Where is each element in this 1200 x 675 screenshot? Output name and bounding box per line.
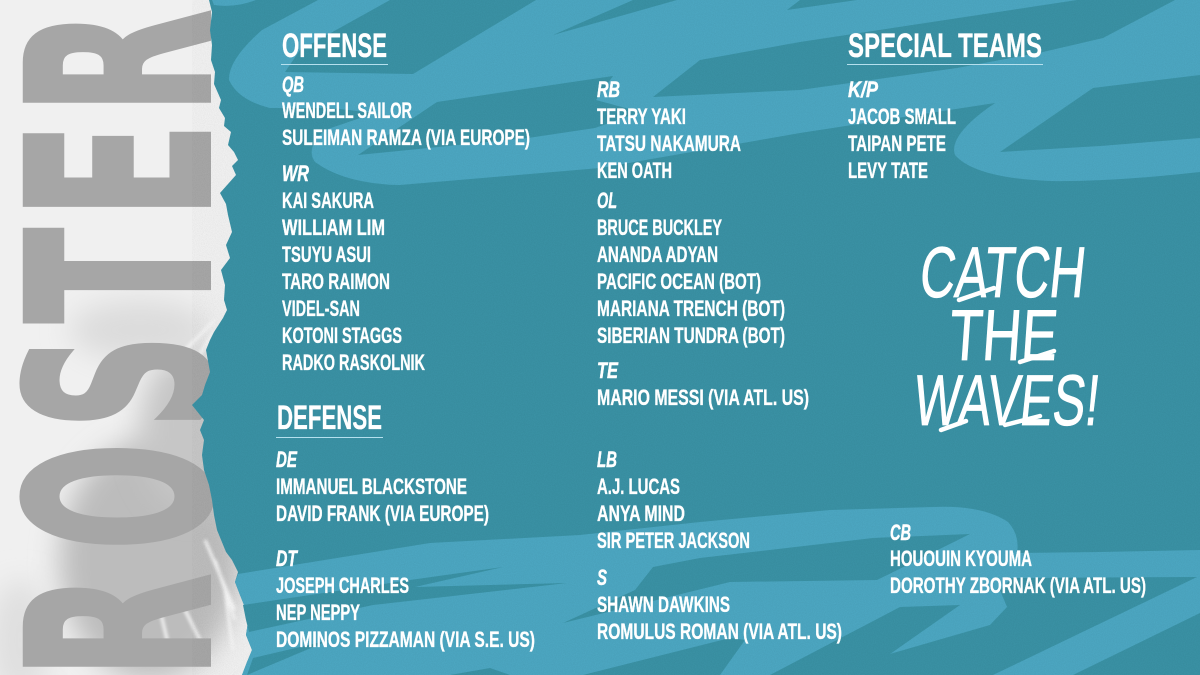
brush strokes: top scribble [212,0,1200,185]
title: ROSTER vertical [0,10,268,675]
roster: defensive tackles: NEP NEPPY [276,600,360,625]
roster: wide receivers: KOTONI STAGGS [282,323,402,348]
roster: defensive ends: DAVID FRANK (VIA EUROPE) [276,501,489,526]
roster: defensive ends: DE [276,447,298,472]
roster: quarterbacks [282,72,530,150]
roster: safeties: SHAWN DAWKINS [597,592,730,617]
roster: defensive tackles: DT [276,546,299,571]
roster: cornerbacks: CB [890,520,911,545]
slogan: catch the waves: WAVES! [910,361,1104,441]
roster: kicker and punter [848,77,956,183]
roster: wide receivers: VIDEL-SAN [282,296,360,321]
slogan: catch the waves: CATCH [916,233,1090,313]
roster: offensive line: BRUCE BUCKLEY [597,215,722,240]
roster: linebackers: LB [597,447,617,472]
roster: safeties: ROMULUS ROMAN (VIA ATL. US) [597,619,842,644]
heading: special teams: SPECIAL TEAMS [848,27,1042,65]
roster: wide receivers: TARO RAIMON [282,269,390,294]
roster: quarterbacks: QB [282,72,304,97]
heading: offense [281,27,388,65]
roster: linebackers [597,447,750,553]
roster: running backs [597,77,741,183]
roster: running backs: KEN OATH [597,158,672,183]
roster: wide receivers: KAI SAKURA [282,188,374,213]
roster: offensive line: ANANDA ADYAN [597,242,718,267]
roster: offensive line [597,188,785,348]
roster: cornerbacks [890,520,1146,598]
heading: defense: DEFENSE [277,399,382,437]
roster: tight ends [597,358,809,410]
roster: tight ends: MARIO MESSI (VIA ATL. US) [597,385,809,410]
roster: running backs: TATSU NAKAMURA [597,131,741,156]
roster: defensive tackles [276,546,535,652]
roster: safeties: S [597,565,607,590]
roster: tight ends: TE [597,358,619,383]
roster: offensive line: MARIANA TRENCH (BOT) [597,296,785,321]
roster: linebackers: ANYA MIND [597,501,685,526]
roster: safeties [597,565,842,644]
roster: kicker and punter: TAIPAN PETE [848,131,946,156]
roster: kicker and punter: LEVY TATE [848,158,928,183]
roster: wide receivers: WILLIAM LIM [282,215,385,240]
roster: offensive line: OL [597,188,617,213]
roster: defensive ends: IMMANUEL BLACKSTONE [276,474,467,499]
roster: linebackers: A.J. LUCAS [597,474,680,499]
panel: torn photo strip [0,0,270,675]
roster: defensive ends [276,447,489,526]
roster: cornerbacks: HOUOUIN KYOUMA [890,546,1032,571]
brush strokes: bottom scribble [235,507,1200,675]
heading: defense [276,399,383,438]
roster: linebackers: SIR PETER JACKSON [597,528,750,553]
heading: offense: OFFENSE [282,27,387,65]
slogan: catch the waves [910,233,1104,441]
roster: defensive tackles: JOSEPH CHARLES [276,573,409,598]
roster: quarterbacks: SULEIMAN RAMZA (VIA EUROPE) [282,125,530,150]
roster: wide receivers [282,161,425,375]
roster: wide receivers: WR [282,161,310,186]
roster: defensive tackles: DOMINOS PIZZAMAN (VIA S.E. US) [276,627,535,652]
roster: kicker and punter: K/P [848,77,879,102]
roster: running backs: RB [597,77,620,102]
roster: kicker and punter: JACOB SMALL [848,104,956,129]
slogan: catch the waves: THE [947,296,1060,376]
roster: wide receivers: TSUYU ASUI [282,242,371,267]
roster: wide receivers: RADKO RASKOLNIK [282,350,425,375]
roster: running backs: TERRY YAKI [597,104,686,129]
roster: quarterbacks: WENDELL SAILOR [282,98,412,123]
roster: offensive line: SIBERIAN TUNDRA (BOT) [597,323,785,348]
roster: offensive line: PACIFIC OCEAN (BOT) [597,269,761,294]
